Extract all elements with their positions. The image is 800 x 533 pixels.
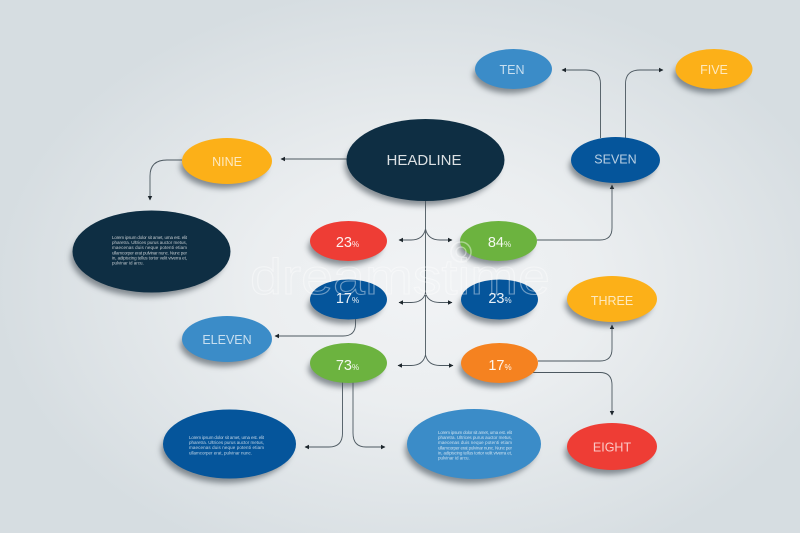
node: 17% blue: 17% [336, 291, 359, 307]
lorem text: light blue oval: Lorem ipsum dolor sit amet, urna est. elit [438, 430, 513, 435]
node: nine [182, 138, 272, 184]
node: 23% blue: 23% [488, 291, 512, 307]
lorem text: light blue oval: ullamcorper erat pulvinar nunc. Nunc per [438, 445, 512, 450]
node: 73% green: 73% [336, 358, 359, 374]
node: 17% blue [310, 280, 387, 320]
connector: 84% to seven [537, 185, 612, 240]
connector: headline to nine [281, 158, 347, 160]
connector: seven to ten [562, 70, 600, 138]
connector: headline trunk with branches [398, 200, 453, 366]
lorem text: dark oval: ullamcorper erat pulvinar nunc. Nunc per [112, 250, 188, 255]
node: 23% red [310, 221, 387, 261]
node: seven [571, 137, 660, 183]
node: eleven: ELEVEN [202, 333, 252, 347]
lorem text: dark oval: pulvinar id arcu. [112, 260, 144, 266]
node: eleven [182, 316, 272, 362]
lorem text: dark blue oval: Lorem ipsum dolor sit amet, urna est. elit [189, 435, 265, 440]
node: 84% green: 84% [488, 235, 511, 251]
panel: light blue text oval [407, 409, 541, 479]
lorem text: light blue oval: pulvinar id arcu. [438, 456, 470, 460]
lorem text: dark oval: pharetra. Ultrices purus auctor metus, [112, 240, 187, 245]
node: 23% blue [461, 280, 538, 320]
connector: 73% to dark blue text oval [305, 382, 342, 447]
node: headline [346, 119, 504, 201]
connector: seven to five [626, 70, 663, 138]
node: headline: HEADLINE [386, 152, 462, 169]
lorem text: dark blue oval: pharetra. Ultrices purus auctor metus, [189, 440, 264, 445]
lorem text: dark blue oval [189, 435, 265, 455]
node: five [676, 49, 752, 89]
node: 73% green [310, 343, 387, 383]
lorem text: light blue oval: pharetra. Ultrices purus auctor metus, [438, 435, 512, 440]
lorem text: light blue oval: in, adipiscing tellus tortor velit viverra et, [438, 450, 512, 455]
panel: dark text oval [72, 210, 230, 292]
node: eight: EIGHT [593, 440, 631, 454]
node: five: FIVE [700, 63, 728, 77]
node: nine: NINE [212, 155, 242, 169]
node: eight [567, 423, 657, 470]
panel: dark blue text oval [163, 410, 296, 478]
lorem text: light blue oval [438, 430, 513, 460]
lorem text: dark blue oval: maecenas duis neque potenti etiam [189, 445, 264, 450]
node: 84% green [460, 221, 537, 261]
node: ten: TEN [500, 63, 524, 77]
node: 17% orange: 17% [488, 358, 512, 374]
node: three: THREE [591, 294, 633, 308]
node: 17% orange [461, 343, 538, 383]
node: ten [475, 49, 552, 89]
lorem text: dark oval [112, 235, 188, 266]
connector: nine to dark text oval [150, 160, 182, 200]
lorem text: dark oval: in, adipiscing tellus tortor velit viverra et, [112, 255, 187, 260]
node: three [567, 276, 657, 322]
connector: 17% to three [538, 325, 612, 361]
connector: 73% to light blue text oval [353, 382, 385, 447]
lorem text: dark oval: Lorem ipsum dolor sit amet, urna est. elit [112, 235, 188, 240]
node: 23% red: 23% [336, 235, 359, 251]
connector: 17% to eight [533, 372, 612, 415]
lorem text: dark blue oval: ullamcorper erat, pulvinar nunc. [189, 450, 252, 455]
watermark: dreamstime [250, 249, 550, 305]
connector: 17% to eleven [275, 319, 356, 336]
lorem text: dark oval: maecenas duis neque potenti etiam [112, 245, 187, 250]
lorem text: light blue oval: maecenas duis neque potenti etiam [438, 440, 512, 445]
node: seven: SEVEN [594, 152, 637, 166]
